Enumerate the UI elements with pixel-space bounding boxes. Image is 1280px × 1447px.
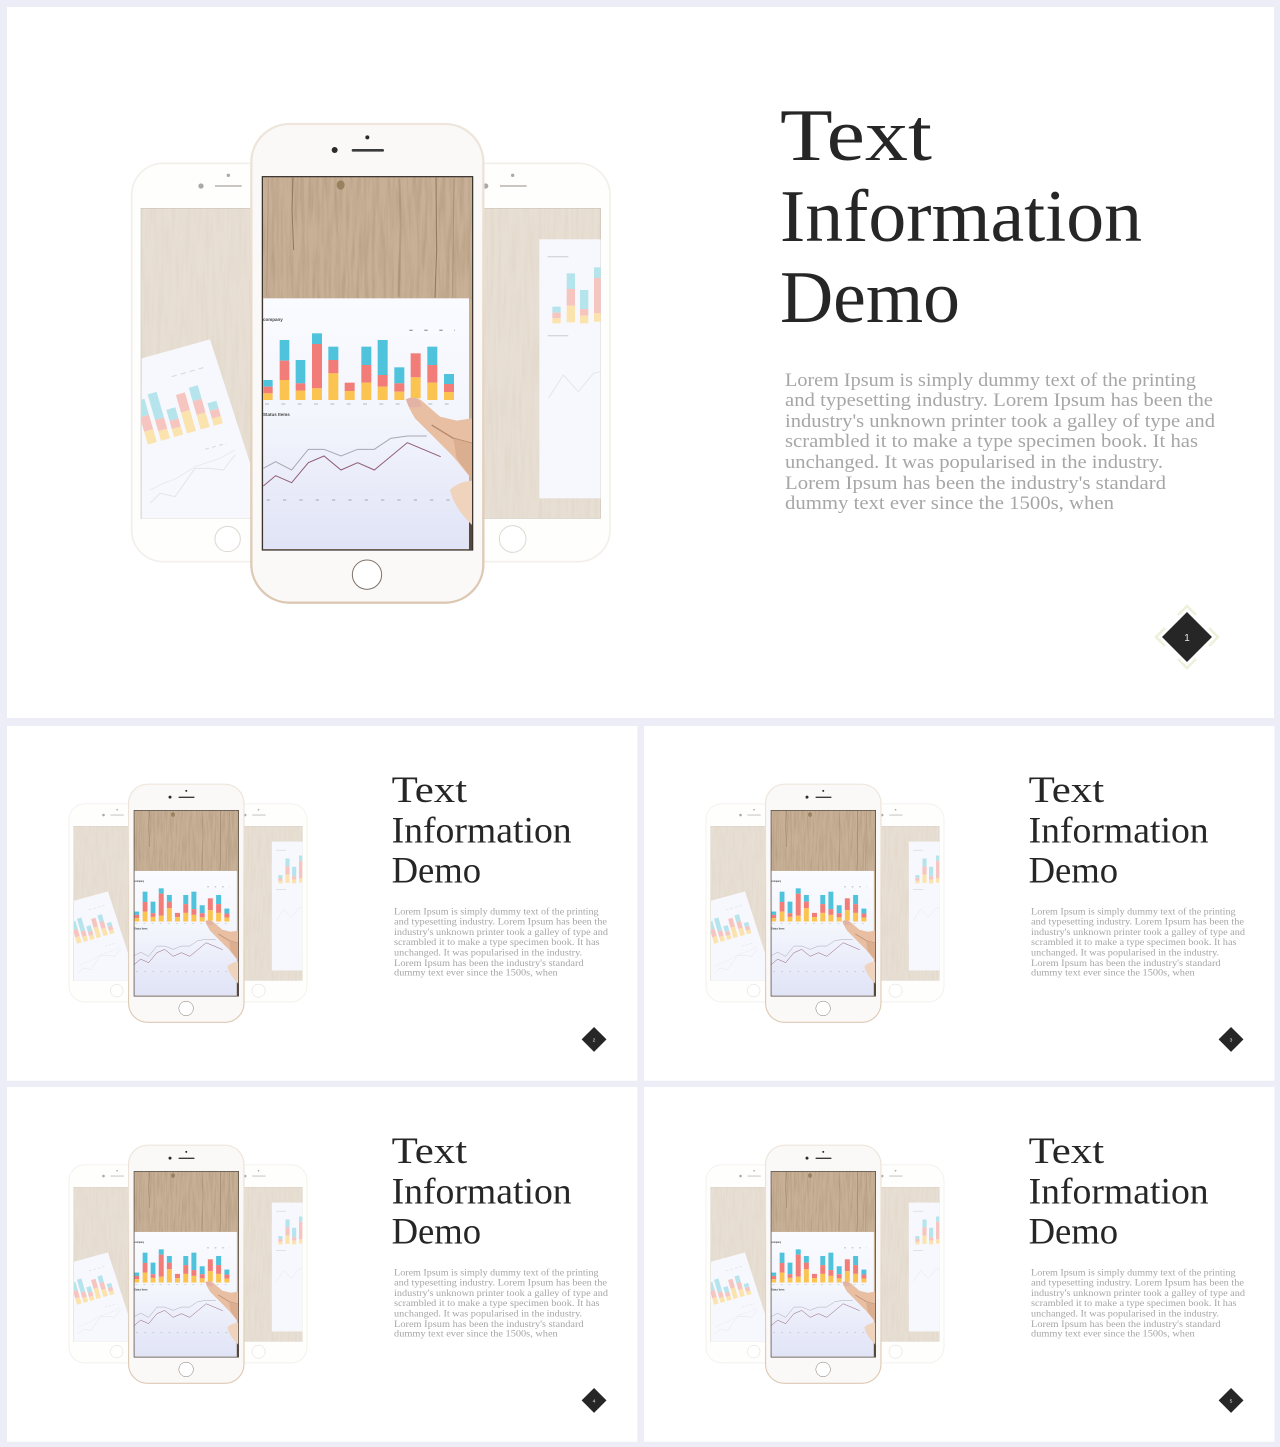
- page number badge: 4: [593, 1398, 596, 1404]
- icon: three phones mockup: Status Items: [263, 412, 290, 417]
- icon: three phones mockup: [69, 1145, 307, 1383]
- body text: [394, 907, 608, 978]
- page number badge: 1: [1184, 633, 1190, 644]
- body text: scrambled it to make a type specimen book. It has: [394, 1298, 600, 1308]
- page number badge: [582, 1388, 606, 1413]
- body text: Lorem Ipsum is simply dummy text of the printing: [1031, 907, 1236, 917]
- page number badge: [1219, 1388, 1243, 1413]
- body text: industry's unknown printer took a galley of type and: [394, 927, 608, 937]
- body text: scrambled it to make a type specimen book. It has: [785, 432, 1198, 452]
- body text: Lorem Ipsum has been the industry's standard: [394, 1319, 584, 1329]
- body text: unchanged. It was popularised in the industry.: [394, 1308, 582, 1318]
- icon: three phones mockup: [132, 124, 610, 603]
- title: Text: [392, 1130, 467, 1171]
- icon: three phones mockup: Status Items: [771, 927, 785, 930]
- page number badge: [582, 1027, 606, 1052]
- title: Information: [392, 1170, 572, 1211]
- panel: slide 3: [644, 726, 1274, 1081]
- title: Demo: [1029, 850, 1118, 891]
- icon: three phones mockup: [706, 784, 944, 1022]
- body text: dummy text ever since the 1500s, when: [785, 494, 1114, 514]
- title: [1029, 769, 1209, 891]
- body text: Lorem Ipsum is simply dummy text of the printing: [394, 1268, 599, 1278]
- icon: three phones mockup: Status Items: [134, 1288, 148, 1291]
- body text: industry's unknown printer took a galley of type and: [394, 1288, 608, 1298]
- title: Text: [780, 95, 932, 177]
- title: Demo: [392, 1211, 481, 1252]
- icon: three phones mockup: company: [263, 317, 283, 322]
- title: Text: [1029, 1130, 1104, 1171]
- title: [1029, 1130, 1209, 1252]
- body text: [1031, 907, 1245, 978]
- icon: three phones mockup: company: [134, 881, 145, 883]
- body text: [394, 1268, 608, 1339]
- body text: industry's unknown printer took a galley of type and: [1031, 1288, 1245, 1298]
- panel: slide 4: [7, 1087, 637, 1442]
- title: Demo: [780, 257, 960, 339]
- body text: Lorem Ipsum is simply dummy text of the printing: [394, 907, 599, 917]
- icon: three phones mockup: Status Items: [134, 927, 148, 930]
- page number badge: [1156, 606, 1218, 668]
- title: [780, 95, 1142, 339]
- body text: and typesetting industry. Lorem Ipsum has been the: [1031, 917, 1244, 927]
- body text: Lorem Ipsum has been the industry's standard: [1031, 958, 1221, 968]
- body text: Lorem Ipsum has been the industry's standard: [394, 958, 584, 968]
- body text: industry's unknown printer took a galley of type and: [785, 412, 1216, 432]
- body text: scrambled it to make a type specimen book. It has: [1031, 937, 1237, 947]
- body text: unchanged. It was popularised in the industry.: [1031, 1308, 1219, 1318]
- body text: scrambled it to make a type specimen book. It has: [1031, 1298, 1237, 1308]
- body text: Lorem Ipsum is simply dummy text of the printing: [1031, 1268, 1236, 1278]
- body text: unchanged. It was popularised in the industry.: [394, 947, 582, 957]
- page number badge: 3: [1230, 1037, 1233, 1043]
- body text: industry's unknown printer took a galley of type and: [1031, 927, 1245, 937]
- icon: three phones mockup: company: [134, 1242, 145, 1244]
- body text: and typesetting industry. Lorem Ipsum has been the: [394, 917, 607, 927]
- body text: and typesetting industry. Lorem Ipsum has been the: [1031, 1278, 1244, 1288]
- body text: Lorem Ipsum has been the industry's standard: [785, 474, 1167, 494]
- body text: [1031, 1268, 1245, 1339]
- body text: dummy text ever since the 1500s, when: [394, 1329, 558, 1339]
- panel: main slide 1: [7, 7, 1274, 718]
- body text: unchanged. It was popularised in the industry.: [1031, 947, 1219, 957]
- body text: dummy text ever since the 1500s, when: [1031, 1329, 1195, 1339]
- title: Information: [780, 176, 1142, 258]
- title: Information: [1029, 1170, 1209, 1211]
- body text: and typesetting industry. Lorem Ipsum has been the: [394, 1278, 607, 1288]
- icon: three phones mockup: [69, 784, 307, 1022]
- page number badge: 5: [1230, 1398, 1233, 1404]
- body text: Lorem Ipsum is simply dummy text of the printing: [785, 371, 1196, 391]
- title: Information: [1029, 809, 1209, 850]
- icon: three phones mockup: company: [771, 881, 782, 883]
- panel: slide 5: [644, 1087, 1274, 1442]
- body text: dummy text ever since the 1500s, when: [394, 968, 558, 978]
- title: [392, 769, 572, 891]
- icon: three phones mockup: [706, 1145, 944, 1383]
- page number badge: 2: [593, 1037, 596, 1043]
- body text: unchanged. It was popularised in the industry.: [785, 453, 1163, 473]
- icon: three phones mockup: Status Items: [771, 1288, 785, 1291]
- body text: dummy text ever since the 1500s, when: [1031, 968, 1195, 978]
- title: Text: [1029, 769, 1104, 810]
- title: Information: [392, 809, 572, 850]
- page number badge: [1219, 1027, 1243, 1052]
- title: Demo: [392, 850, 481, 891]
- icon: three phones mockup: company: [771, 1242, 782, 1244]
- title: [392, 1130, 572, 1252]
- title: Demo: [1029, 1211, 1118, 1252]
- panel: slide 2: [7, 726, 637, 1081]
- body text: [785, 371, 1216, 514]
- body text: and typesetting industry. Lorem Ipsum has been the: [785, 391, 1213, 411]
- body text: Lorem Ipsum has been the industry's standard: [1031, 1319, 1221, 1329]
- title: Text: [392, 769, 467, 810]
- body text: scrambled it to make a type specimen book. It has: [394, 937, 600, 947]
